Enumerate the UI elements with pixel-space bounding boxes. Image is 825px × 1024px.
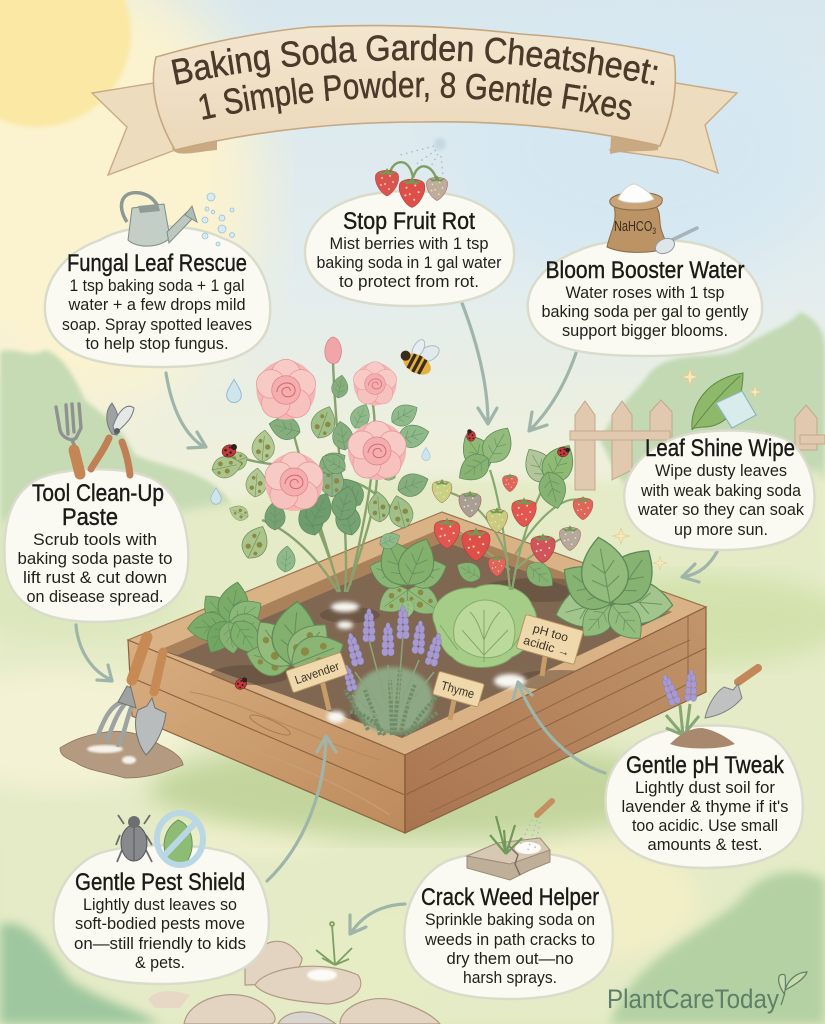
text: baking soda in 1 gal water (316, 253, 502, 272)
text: to protect from rot. (339, 272, 479, 291)
sign: pH too acidic: acidic → (522, 633, 572, 660)
rose stems (235, 360, 408, 592)
text: baking soda paste to (18, 549, 172, 568)
soil texture (210, 578, 610, 724)
rose blooms (256, 359, 316, 420)
text (622, 778, 788, 854)
lavender plant (341, 606, 445, 735)
arrow: pest shield to bed (267, 736, 336, 881)
arrow: tool paste to tools (76, 625, 112, 681)
ladybug on strawberry leaf (466, 429, 476, 441)
panel: leaf shine wipe (624, 368, 814, 550)
sign: Lavender (286, 652, 348, 710)
sign: Lavender: Lavender (293, 659, 341, 687)
text: Scrub tools with (33, 530, 157, 549)
panel: stop fruit rot (305, 138, 514, 306)
water drop right (422, 447, 430, 461)
panel: gentle pH tweak (605, 668, 803, 868)
text: 1 tsp baking soda + 1 gal (70, 276, 244, 295)
heading: Tool Clean-Up (32, 480, 164, 507)
ladybug on strawberry leaf right (557, 447, 571, 457)
panel: bloom booster water (528, 184, 762, 356)
sparkle near big leaf (613, 528, 629, 544)
strawberry plant (432, 421, 593, 594)
sign: Thyme: Thyme (439, 679, 476, 701)
banner fold right (610, 135, 660, 154)
text: lavender & thyme if it's (622, 797, 788, 816)
text: to help stop fungus. (86, 334, 228, 353)
heading: Gentle Pest Shield (75, 869, 245, 896)
icon: leaf (692, 373, 743, 430)
rose bud (325, 337, 341, 364)
text: up more sun. (674, 520, 768, 539)
banner tail right (610, 82, 737, 173)
heading: Bloom Booster Water (546, 257, 744, 284)
text (74, 895, 246, 972)
plant signs (286, 614, 584, 720)
arrow: crack weed to path weed (350, 904, 405, 934)
text: Lightly dust soil for (635, 778, 775, 797)
panel: fungal leaf rescue (45, 193, 270, 367)
text: with weak baking soda (640, 481, 802, 500)
panel: crack weed helper (404, 801, 613, 999)
text: on—still friendly to kids (74, 934, 246, 953)
text (542, 283, 749, 340)
heading: Fungal Leaf Rescue (67, 250, 247, 277)
icon: pruners (91, 403, 134, 475)
water drop lower (211, 488, 221, 504)
logo: PlantCareToday: PlantCareToday (607, 984, 779, 1014)
icon: water spray (202, 193, 234, 246)
icon: cracked paver (467, 838, 550, 880)
text (18, 530, 172, 606)
icon: sparkle small (749, 386, 761, 398)
stepping stone path (148, 941, 440, 1024)
weed in the path (316, 922, 352, 965)
text: soap. Spray spotted leaves (62, 315, 252, 334)
big leaf plant (551, 533, 675, 648)
soil (160, 530, 672, 738)
text: lift rust & cut down (23, 568, 167, 587)
text: support bigger blooms. (562, 321, 728, 340)
icon: watering can (121, 193, 197, 246)
heading: Leaf Shine Wipe (645, 435, 795, 462)
icon: weed (490, 816, 522, 854)
text (424, 910, 595, 987)
icon: baking soda sack: NaHCO (614, 218, 667, 235)
icon: baking soda sack: 3 (652, 226, 656, 236)
sign: pH too acidic (516, 614, 584, 676)
spotted leafy plant (243, 600, 350, 683)
panel: tool clean-up paste (4, 403, 188, 622)
icon: hand fork (56, 404, 81, 474)
text: & pets. (135, 953, 185, 972)
icon: scoop (653, 228, 697, 257)
hand fork (98, 637, 147, 745)
text (316, 234, 502, 291)
plank joints (130, 616, 706, 833)
rose leaves (251, 429, 276, 463)
bee (396, 330, 446, 380)
rose bush (219, 337, 432, 592)
heading (32, 480, 164, 531)
icon: strawberries with mist (375, 138, 447, 208)
title line 2: 1 Simple Powder, 8 Gentle Fixes (199, 70, 632, 120)
banner fold left (172, 130, 217, 154)
arrow: pH tweak to soil (513, 682, 605, 773)
icon: no-leaf sign (157, 813, 203, 865)
sign: pH too acidic: pH too (531, 621, 570, 645)
ladybug on bed (233, 676, 250, 691)
text: too acidic. Use small (632, 816, 778, 835)
text: on disease spread. (26, 587, 164, 606)
text: water so they can soak (637, 500, 804, 519)
text (62, 276, 252, 353)
text: Sprinkle baking soda on (425, 910, 595, 929)
centre leafy plant (365, 533, 451, 622)
bed shadow on grass (150, 742, 690, 838)
text: baking soda per gal to gently (542, 302, 749, 321)
text: dry them out—no (446, 949, 574, 968)
text: weeds in path cracks to (424, 930, 595, 949)
sign: Thyme (433, 671, 484, 720)
lavender foliage (353, 667, 433, 733)
panel: gentle pest shield (53, 813, 269, 984)
trowel (136, 652, 166, 755)
text: water + a few drops mild (68, 295, 246, 314)
text: Lightly dust leaves so (83, 895, 237, 914)
heading: Stop Fruit Rot (343, 208, 475, 235)
arrow: leaf shine to plant (682, 550, 718, 582)
icon: lavender sprig (658, 669, 735, 748)
icon: cloth (716, 391, 756, 428)
text: Water roses with 1 tsp (566, 283, 724, 302)
arrow: bloom to strawberry (529, 353, 576, 431)
heading: Crack Weed Helper (421, 884, 599, 911)
text: amounts & test. (648, 835, 762, 854)
text: soft-bodied pests move (75, 914, 245, 933)
water drop left (227, 379, 241, 403)
text: Wipe dusty leaves (655, 461, 787, 480)
wooden fence (570, 400, 825, 490)
icon: baking soda sack (607, 184, 668, 252)
right face planks (405, 607, 706, 833)
text: Mist berries with 1 tsp (330, 234, 488, 253)
berries (434, 518, 460, 548)
soil mound with tools (60, 637, 183, 778)
text: harsh sprays. (463, 968, 557, 987)
text (637, 461, 804, 539)
banner main (153, 26, 675, 150)
icon: trowel (705, 668, 758, 718)
left face planks (128, 640, 405, 833)
baking soda dustings (327, 602, 526, 723)
raised garden bed (128, 512, 706, 838)
banner: title ribbon (90, 24, 738, 176)
title line 1: Baking Soda Garden Cheatsheet: (172, 34, 658, 86)
arrow: fungal to rose (166, 373, 206, 448)
icon: shaker with sprinkles (520, 801, 552, 850)
arrow: fruit rot to strawberry (462, 303, 497, 424)
heading: Gentle pH Tweak (626, 752, 785, 779)
back inner wall and rim (128, 512, 706, 755)
icon: sparkle (681, 368, 699, 386)
heading: Paste (62, 504, 118, 531)
icon: beetle (116, 815, 152, 862)
banner tail left (92, 82, 218, 175)
strawberry leaves (454, 428, 499, 476)
lettuce (433, 584, 537, 668)
ladybug on rose leaf (210, 442, 244, 480)
basil plant (186, 580, 270, 660)
sparkle lower (654, 557, 666, 569)
baking soda patch on stone (307, 969, 337, 981)
logo: PlantCareToday (607, 972, 807, 1014)
